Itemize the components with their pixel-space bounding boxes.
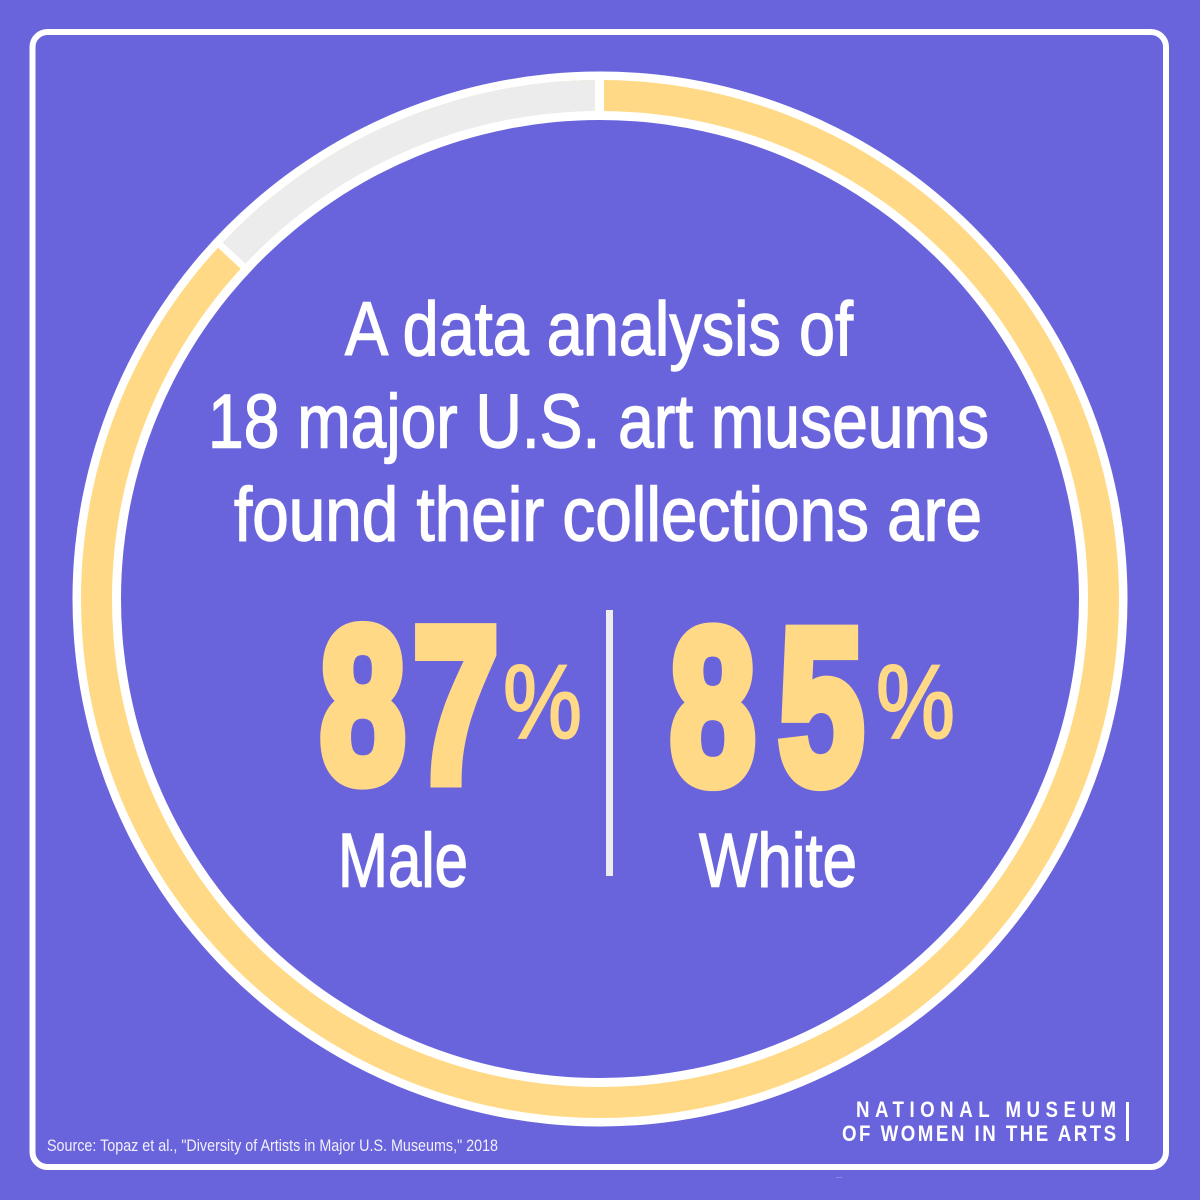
- label male: Male: [338, 818, 468, 904]
- divider between stats: [606, 610, 613, 876]
- number 87: 87: [320, 583, 499, 829]
- source note: Source: Topaz et al., "Diversity of Artists in Major U.S. Museums," 2018: [47, 1136, 498, 1155]
- stat: 85% white: [670, 584, 955, 904]
- donut chart: 87% yellow, 13% grey: [72, 72, 1128, 1126]
- headline: found their collections are: [234, 472, 982, 558]
- label white: White: [699, 818, 857, 904]
- headline: [208, 287, 989, 558]
- logo: National Museum of Women in the Arts: OF WOMEN IN THE ARTS: [842, 1123, 1116, 1146]
- headline: A data analysis of: [345, 287, 854, 372]
- percent sign: %: [503, 644, 582, 761]
- number 85: 85: [670, 584, 864, 830]
- headline: 18 major U.S. art museums: [208, 380, 989, 464]
- logo: National Museum of Women in the Arts: [842, 1099, 1129, 1146]
- logo: National Museum of Women in the Arts: NATIONAL MUSEUM: [856, 1099, 1116, 1122]
- percent sign: %: [876, 644, 955, 761]
- stat: 87% male: [320, 583, 582, 904]
